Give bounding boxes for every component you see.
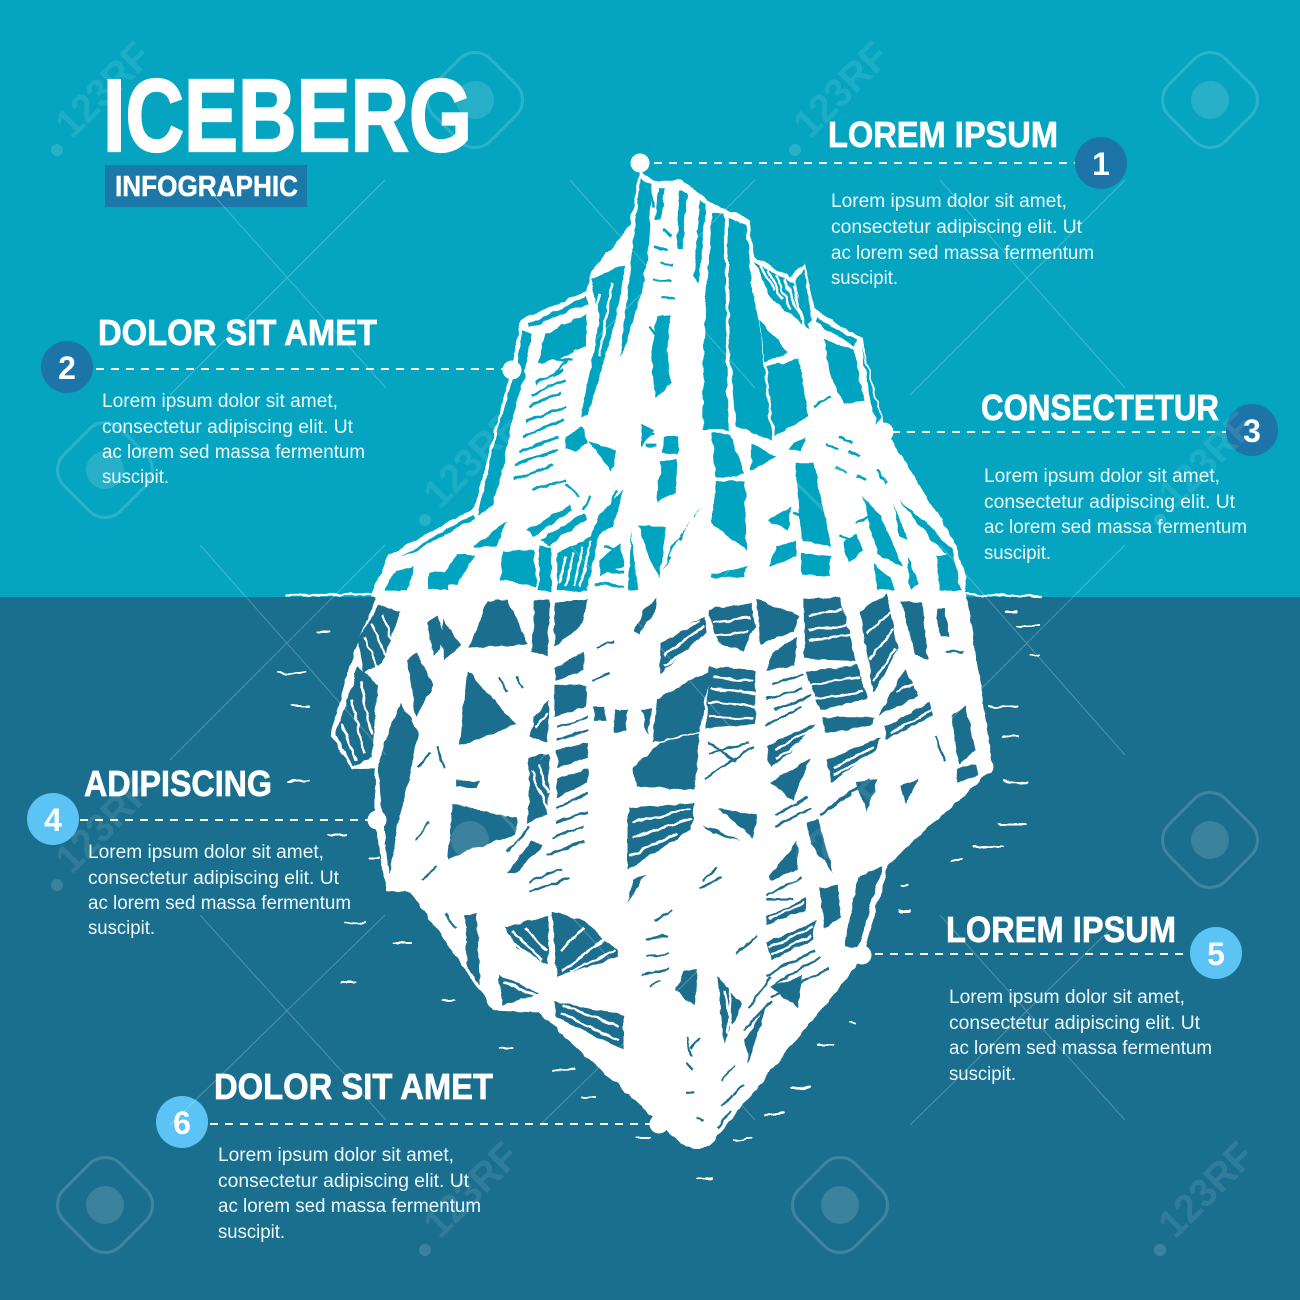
body 3: ac lorem sed massa fermentum	[984, 517, 1247, 538]
body 1: Lorem ipsum dolor sit amet,	[831, 191, 1067, 212]
body 3: consectetur adipiscing elit. Ut	[984, 492, 1236, 513]
body 2: suscipit.	[102, 467, 169, 488]
white strokes over upper facets	[559, 265, 806, 587]
body 4	[88, 842, 351, 939]
body 1	[831, 191, 1094, 289]
callout 4: 4	[44, 802, 62, 838]
waterline	[285, 593, 1042, 597]
body 2: consectetur adipiscing elit. Ut	[102, 417, 354, 438]
callout 1: 1	[1092, 146, 1110, 182]
body 4: ac lorem sed massa fermentum	[88, 893, 351, 914]
subtitle badge	[105, 165, 307, 207]
body 2: ac lorem sed massa fermentum	[102, 442, 365, 463]
body 4: suscipit.	[88, 918, 155, 939]
body 3: suscipit.	[984, 543, 1051, 564]
body 4: Lorem ipsum dolor sit amet,	[88, 842, 324, 863]
body 3	[984, 466, 1247, 564]
body 1: consectetur adipiscing elit. Ut	[831, 217, 1083, 238]
heading 4: ADIPISCING	[84, 763, 272, 804]
body 6: ac lorem sed massa fermentum	[218, 1196, 481, 1217]
callout 6	[156, 1066, 668, 1243]
body 5: Lorem ipsum dolor sit amet,	[949, 987, 1185, 1008]
watermark overlay: 123RF	[785, 34, 898, 146]
hatch marks on dark facets	[342, 610, 932, 1041]
callout 2	[41, 312, 522, 488]
callout 4	[27, 763, 386, 939]
watermark overlay: 123RF	[1150, 404, 1263, 516]
fine hatching on lower ice	[416, 641, 963, 1128]
subtitle badge: INFOGRAPHIC	[115, 171, 298, 203]
body 6: Lorem ipsum dolor sit amet,	[218, 1145, 454, 1166]
heading 3: CONSECTETUR	[981, 387, 1219, 428]
body 2	[102, 391, 365, 488]
iceberg lower part under water	[331, 594, 992, 1146]
callout 5: 5	[1207, 936, 1225, 972]
watermark overlay: 123RF	[785, 769, 898, 881]
iceberg upper part above water	[372, 173, 966, 597]
body 4: consectetur adipiscing elit. Ut	[88, 868, 340, 889]
iceberg illustration	[278, 173, 1042, 1179]
watermark overlay: 123RF	[47, 769, 160, 881]
watermark overlay: 123RF	[415, 1134, 528, 1246]
body 5: suscipit.	[949, 1064, 1016, 1085]
body 6: consectetur adipiscing elit. Ut	[218, 1171, 470, 1192]
body 1: suscipit.	[831, 268, 898, 289]
body 3: Lorem ipsum dolor sit amet,	[984, 466, 1220, 487]
heading 1: LOREM IPSUM	[828, 114, 1058, 155]
watermark overlay: 123RF	[47, 34, 160, 146]
callout 6: 6	[173, 1105, 191, 1141]
callout 5	[852, 909, 1242, 1085]
watermark overlay: 123RF	[415, 404, 528, 516]
body 5: consectetur adipiscing elit. Ut	[949, 1013, 1201, 1034]
body 6: suscipit.	[218, 1222, 285, 1243]
callout 3	[874, 387, 1278, 564]
sky panel	[0, 0, 1300, 597]
hatch marks on upper ice	[513, 193, 886, 587]
body 5	[949, 987, 1212, 1085]
heading 5: LOREM IPSUM	[946, 909, 1176, 950]
heading 2: DOLOR SIT AMET	[98, 312, 377, 353]
watermark overlay: 123RF	[1150, 1134, 1263, 1246]
body 5: ac lorem sed massa fermentum	[949, 1038, 1212, 1059]
callout 2: 2	[58, 350, 76, 386]
body 6	[218, 1145, 481, 1243]
callout 3: 3	[1243, 413, 1261, 449]
body 2: Lorem ipsum dolor sit amet,	[102, 391, 338, 412]
heading 6: DOLOR SIT AMET	[214, 1066, 493, 1107]
title: ICEBERG	[103, 58, 472, 173]
water ripple dashes	[278, 612, 1040, 1179]
body 1: ac lorem sed massa fermentum	[831, 243, 1094, 264]
water panel	[0, 597, 1300, 1300]
callout 1	[630, 114, 1127, 289]
